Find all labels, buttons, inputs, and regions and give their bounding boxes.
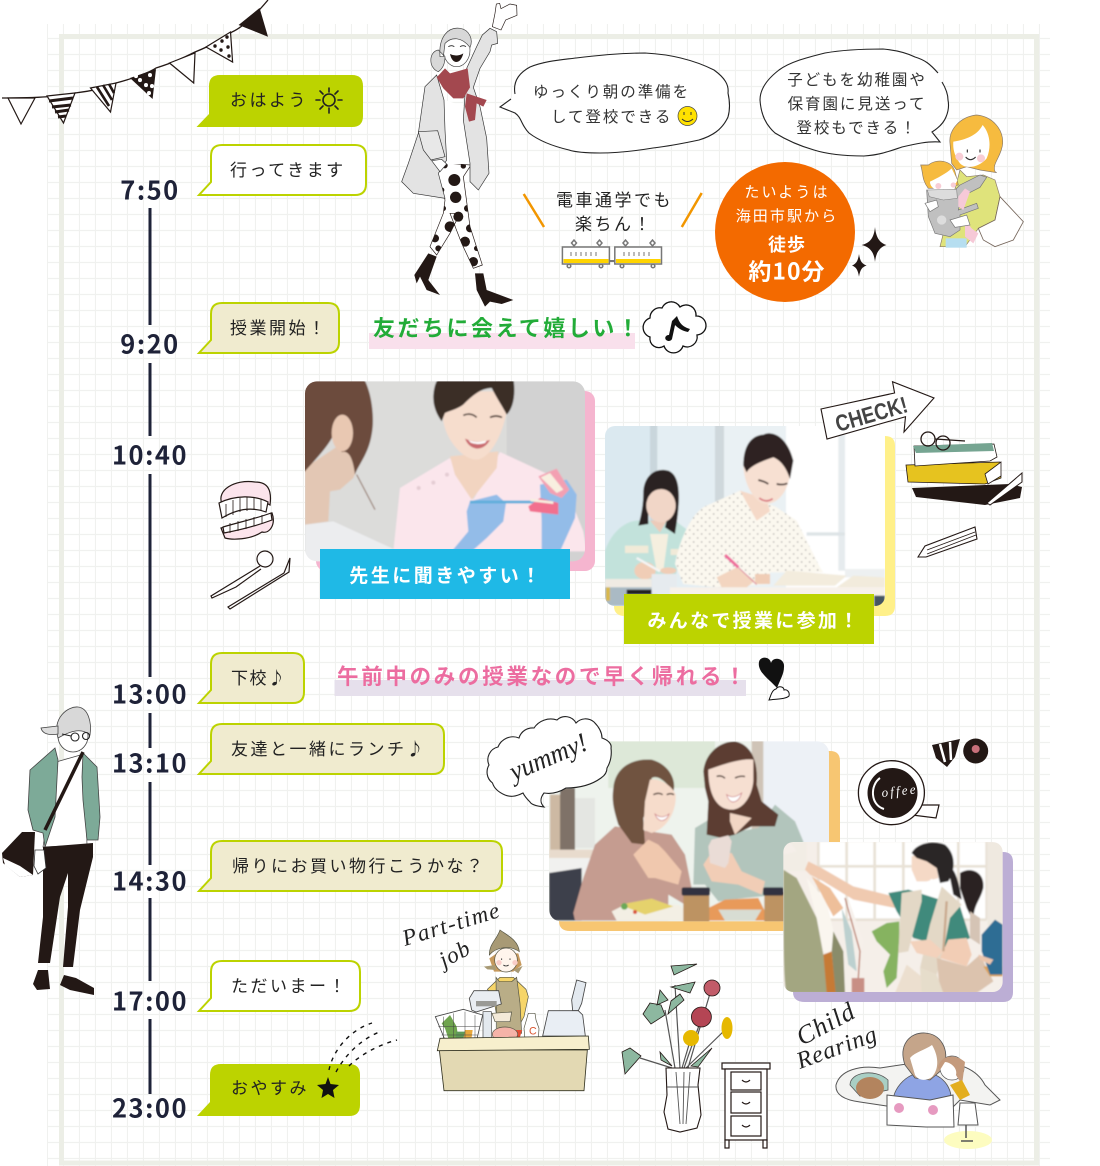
bubble: good morning <box>196 75 363 127</box>
photo <box>600 424 890 614</box>
time labels: 17:00 <box>112 982 188 1018</box>
bubble: school out <box>199 653 304 703</box>
bubble: lunch: 友達と一緒にランチ♪ <box>231 735 426 760</box>
speech bubble: morning prep: して登校できる <box>551 105 672 127</box>
icon: hearts <box>759 658 789 700</box>
illustration: cashier at counter: C <box>529 1025 537 1037</box>
speech bubble: drop off children: 子どもを幼稚園や <box>787 68 927 90</box>
label: child rearing: Child <box>791 996 860 1051</box>
speech bubble: drop off children <box>760 49 949 156</box>
icon: dental tools <box>211 548 290 609</box>
speech cloud: yummy: yummy! <box>502 727 592 788</box>
pants <box>38 843 93 967</box>
callout: walking distance badge: 海田市駅から <box>736 205 838 226</box>
hand <box>492 3 517 30</box>
label: part-time job: job <box>432 935 475 974</box>
bubble: leaving home <box>199 145 366 195</box>
baby legs <box>958 188 978 243</box>
body <box>940 170 1000 247</box>
icon: check arrow: CHECK! <box>832 391 911 437</box>
panel: dental teacher photo <box>300 378 595 599</box>
baby head <box>921 161 958 188</box>
stems <box>640 985 727 1068</box>
speech bubble: morning prep <box>500 53 730 153</box>
speech cloud: yummy <box>487 717 611 807</box>
vase <box>664 1068 701 1132</box>
speech bubble: drop off children: 登校もできる！ <box>796 116 918 138</box>
book <box>887 1095 954 1127</box>
bubble: shopping: 帰りにお買い物行こうかな？ <box>232 852 486 877</box>
time labels: 10:40 <box>112 436 188 472</box>
label <box>320 549 570 599</box>
callout: walking distance badge: 徒歩 <box>768 231 806 257</box>
heading: happy to meet friends: 友だちに会えて嬉しい！ <box>373 311 641 343</box>
heading: early finish: 午前中のみの授業なので早く帰れる！ <box>337 660 748 691</box>
meat tray <box>508 1030 522 1042</box>
panel: shopping photo <box>780 838 1013 1002</box>
speech bubble: drop off children: 保育園に見送って <box>788 92 926 114</box>
icon: music note cloud <box>643 302 706 353</box>
time labels <box>112 170 188 1126</box>
photo <box>783 842 1003 992</box>
carrier <box>927 175 987 237</box>
bubble: home <box>199 961 360 1011</box>
time labels: 14:30 <box>112 862 188 898</box>
time labels: 13:10 <box>112 744 188 780</box>
icon: shooting star <box>317 1023 397 1098</box>
illustration: waving girl <box>402 3 517 307</box>
mother <box>893 1072 951 1113</box>
panel: lunch photo <box>545 738 840 931</box>
leaves <box>622 964 712 1074</box>
illustration: standing woman with bag <box>2 707 100 995</box>
callout: commute by train: 電車通学でも <box>556 186 673 211</box>
icon: sun <box>316 88 342 113</box>
icon: coffee cup: offee <box>881 781 916 800</box>
bubble: school out: 下校♪ <box>231 664 286 689</box>
label: 先生に聞きやすい！ <box>349 561 543 588</box>
bag <box>978 197 1023 247</box>
hands <box>925 200 970 227</box>
label: みんなで授業に参加！ <box>647 606 861 633</box>
jacket <box>28 748 100 847</box>
icon: pencil <box>918 527 977 557</box>
icon: dentures <box>219 482 273 539</box>
bubble: class starts <box>199 303 339 353</box>
bubble: good morning: おはよう <box>230 86 308 111</box>
eggs <box>492 1012 512 1022</box>
callout: commute by train: 楽ちん！ <box>575 210 653 235</box>
icon: train <box>562 240 662 268</box>
boots <box>414 253 513 307</box>
bubble: good night: おやすみ <box>231 1074 309 1099</box>
bubble: good night <box>197 1023 397 1116</box>
shirt <box>43 754 87 847</box>
icon: sparkles <box>852 227 886 277</box>
callout: walking distance badge: 約10分 <box>748 252 826 286</box>
head <box>443 33 470 67</box>
cardigan <box>402 75 447 198</box>
sleeping child <box>850 1073 888 1096</box>
bubble: shopping <box>199 841 502 891</box>
bag strap <box>45 752 83 830</box>
scale <box>469 991 501 1012</box>
bubble: home: ただいまー！ <box>231 972 348 997</box>
speech bubble: morning prep: ゆっくり朝の準備を <box>533 80 690 102</box>
illustration: small cabinet <box>722 1063 770 1148</box>
illustration: flower vase <box>622 964 732 1132</box>
label: child rearing <box>791 996 881 1075</box>
scarf <box>437 68 487 122</box>
timeline: vertical line segments <box>148 208 152 1094</box>
panel: class photo <box>600 424 895 644</box>
label: part-time job: Part-time <box>398 897 504 951</box>
glasses <box>921 432 965 450</box>
woman body <box>487 977 528 1033</box>
time labels: 13:00 <box>112 674 188 712</box>
illustration: mother reading to children <box>836 1033 1000 1149</box>
bubble: class starts: 授業開始！ <box>230 314 328 339</box>
head <box>58 720 88 752</box>
bottle <box>524 1013 539 1042</box>
photo <box>300 378 590 568</box>
bag <box>2 832 35 877</box>
lamp <box>958 1103 978 1125</box>
icon: chocolates <box>932 738 988 767</box>
blanket <box>836 1062 1000 1115</box>
bubble: lunch <box>199 724 444 774</box>
second child <box>940 1056 964 1080</box>
hat and hair <box>489 953 522 972</box>
dandelions <box>683 1030 699 1046</box>
icon: stacked books <box>906 432 1022 505</box>
icon: coffee cup <box>858 761 939 825</box>
illustration: mother and baby <box>921 115 1023 248</box>
bubble: leaving home: 行ってきます <box>230 156 346 181</box>
leggings <box>430 163 482 268</box>
lamp glow <box>944 1131 992 1149</box>
white top <box>444 100 469 164</box>
register <box>572 980 586 1011</box>
label <box>624 594 874 644</box>
bunting flags <box>2 0 268 124</box>
hand <box>34 850 46 874</box>
roses <box>704 980 720 996</box>
label: part-time job <box>398 897 504 974</box>
label: child rearing: Rearing <box>792 1021 881 1075</box>
time labels: 7:50 <box>120 170 180 208</box>
callout: walking distance badge: たいようは <box>744 181 830 202</box>
icon: smiley <box>678 106 697 126</box>
photo <box>545 738 835 928</box>
mother hair <box>950 115 1003 173</box>
callout: walking distance badge <box>715 162 855 302</box>
mother face <box>953 125 990 167</box>
callout: commute by train <box>524 186 702 268</box>
time labels: 23:00 <box>112 1088 188 1126</box>
time labels: 9:20 <box>120 324 180 362</box>
illustration: cashier at counter <box>435 930 589 1091</box>
shoes <box>33 970 94 995</box>
counter top <box>437 1036 589 1051</box>
counter body <box>439 1050 587 1091</box>
basket <box>435 1009 483 1040</box>
